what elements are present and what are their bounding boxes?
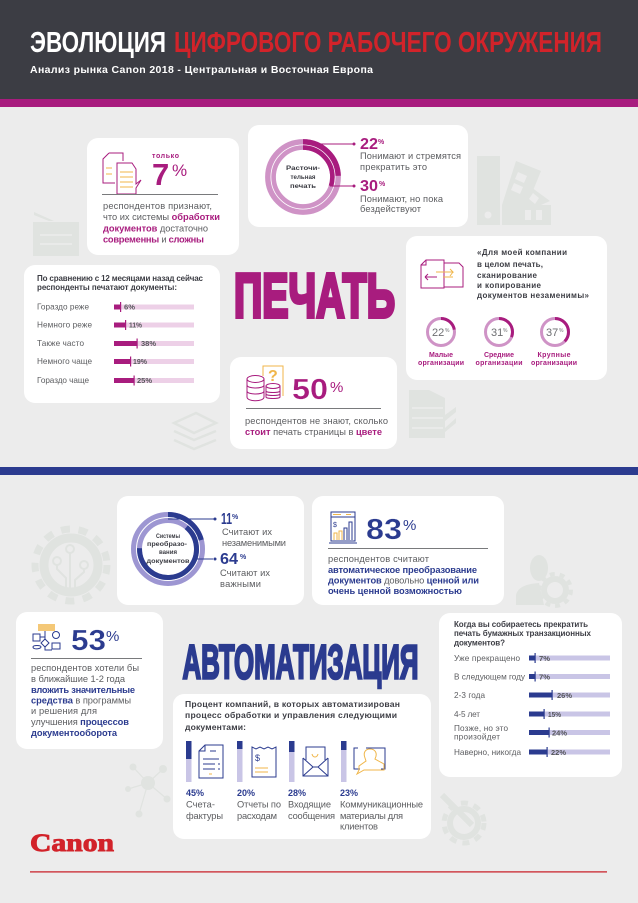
text block — [245, 416, 388, 437]
heading: print: ПЕЧАТЬ — [234, 262, 395, 331]
panel: print frequency bar chart — [24, 265, 220, 403]
donut label: документов — [146, 558, 190, 565]
item labels: клиентов — [340, 822, 378, 832]
figure: 7% — [152, 157, 187, 192]
figure: 22%: % — [378, 139, 385, 146]
background icon: paper stack — [174, 413, 216, 449]
donut label — [146, 533, 190, 565]
item labels: материалы для — [340, 811, 403, 821]
panel title: процесс обработки и управления следующими — [185, 710, 397, 720]
bar chart: 19% — [133, 357, 147, 366]
panel title: документами: — [185, 722, 246, 732]
text block: средства в программы — [31, 696, 131, 706]
text: 30% description — [360, 194, 444, 214]
icon: chat with person — [354, 748, 385, 774]
panel: 53 percent — [16, 612, 163, 749]
panel: stop printing bar chart — [439, 613, 622, 777]
donut captions: Средние — [484, 352, 514, 359]
bar chart: 24% — [552, 728, 567, 738]
subtitle: Анализ рынка Canon 2018 - Центральная и Восточная Европа — [30, 64, 373, 76]
bar chart — [454, 653, 610, 757]
donut captions: Малые — [429, 352, 453, 359]
bar chart: Гораздо чаще — [37, 376, 89, 385]
bar chart: Немного реже — [37, 320, 92, 330]
figure: 11%: 11 — [221, 511, 232, 528]
figure: 83%: 83 — [366, 514, 402, 546]
text block: и решения для — [31, 706, 97, 716]
text block: современны и сложны — [103, 234, 204, 244]
quote text: и копирование — [477, 281, 542, 290]
donut: medium organisations: 31 — [491, 327, 503, 339]
text block: документов достаточно — [103, 224, 208, 234]
item labels: Входящие — [288, 800, 331, 810]
chart title — [37, 274, 204, 292]
quote text: сканирование — [477, 271, 538, 280]
background icon: wrench and gear — [442, 795, 484, 843]
icon: financial chart — [329, 512, 357, 543]
donut: large organisations: 37 — [546, 327, 558, 339]
bar chart: 4-5 лет — [454, 710, 480, 719]
icon: process with money — [33, 624, 60, 650]
donut label: преобразо- — [147, 540, 187, 548]
text block — [31, 663, 139, 738]
item labels: Отчеты по — [237, 800, 281, 810]
bar chart: 7% — [539, 672, 550, 682]
donut label: вания — [159, 549, 177, 556]
panel: only 7 percent — [87, 138, 239, 255]
quote text: «Для моей компании — [477, 248, 567, 257]
text: 22% description: Понимают и стремятся — [360, 151, 461, 161]
text: 11% description: незаменимыми — [222, 538, 286, 548]
figure: 53%: 53 — [71, 625, 106, 657]
figure: 64% — [220, 551, 247, 568]
donut captions — [418, 352, 577, 367]
item labels: Счета- — [186, 800, 215, 810]
donut: small organisations: % — [445, 328, 450, 334]
icon: document exchange — [421, 260, 463, 288]
donut label: печать — [290, 183, 316, 190]
bar chart: 7% — [539, 654, 550, 663]
background icon: office printer — [409, 390, 456, 438]
bar chart: 15% — [548, 710, 561, 719]
donut: large organisations — [542, 318, 568, 346]
figure: 11%: % — [232, 514, 239, 521]
section divider band — [0, 467, 638, 475]
chart title — [454, 620, 592, 648]
figure: 30%: 30 — [360, 178, 378, 195]
donut captions: организации — [476, 360, 522, 367]
panel title — [185, 699, 400, 732]
icon: financial chart: $ — [333, 522, 337, 529]
bar chart: 25% — [137, 376, 152, 385]
text block: что их системы обработки — [103, 212, 220, 222]
text block: стоит печать страницы в цвете — [245, 427, 382, 437]
panel: wasteful printing — [248, 125, 468, 227]
percent values: 23% — [340, 788, 358, 798]
chart title: документов? — [454, 638, 505, 648]
figure: 83% — [366, 514, 416, 546]
bar chart: Позже, но это — [454, 724, 508, 733]
heading: automation: АВТОМАТИЗАЦИЯ — [182, 636, 418, 690]
figure: 83%: % — [403, 517, 416, 534]
text: 64% description: важными — [220, 579, 261, 589]
donut chart — [268, 142, 356, 212]
bar chart: Немного чаще — [37, 357, 92, 366]
figure: 50% — [292, 374, 343, 406]
text block: очень ценной возможностью — [328, 586, 462, 596]
text block: респондентов признают, — [103, 201, 212, 211]
text: 30% description: Понимают, но пока — [360, 194, 444, 204]
icon: receipt — [252, 747, 276, 777]
bar chart: В следующем году — [454, 672, 526, 682]
donut label — [286, 165, 320, 190]
text block — [328, 554, 479, 596]
figure: 53%: % — [106, 628, 119, 645]
icon: coins and question: ? — [268, 368, 278, 385]
donut captions: организации — [418, 360, 464, 367]
text block: респондентов не знают, сколько — [245, 416, 388, 426]
donut: large organisations: % — [559, 328, 564, 334]
background icon: network — [125, 764, 170, 818]
text block: респондентов хотели бы — [31, 663, 139, 673]
bar chart: 6% — [124, 302, 135, 312]
text: 22% description — [360, 151, 461, 172]
quote text: документов незаменимы» — [477, 291, 590, 300]
chart title: По сравнению с 12 месяцами назад сейчас — [37, 274, 204, 283]
icon: envelope — [303, 747, 328, 776]
background icon: person with gear — [516, 555, 571, 606]
item labels — [186, 800, 423, 832]
percent values: 45% — [186, 788, 204, 798]
label: only: только — [152, 153, 179, 160]
icon: invoice — [199, 745, 223, 778]
quote text — [477, 248, 590, 300]
text block: улучшения процессов — [31, 717, 129, 727]
text block: респондентов считают — [328, 554, 430, 564]
bar chart: 2-3 года — [454, 691, 485, 700]
text: 64% description: Считают их — [220, 568, 270, 578]
bar chart: 26% — [557, 691, 572, 700]
bar chart: произойдет — [454, 732, 500, 742]
figure: 64%: % — [240, 554, 247, 561]
bar chart: Уже прекращено — [454, 654, 520, 663]
item labels: фактуры — [186, 811, 223, 821]
item labels: Коммуникационные — [340, 800, 423, 810]
item labels: расходам — [237, 811, 277, 821]
bar chart: 11% — [129, 320, 142, 330]
bar chart: Наверно, никогда — [454, 748, 521, 757]
icon: documents — [103, 153, 141, 194]
donut label: тельная — [290, 174, 316, 181]
text block: документооборота — [31, 728, 118, 738]
text block — [103, 201, 220, 244]
chart title: респонденты печатают документы: — [37, 283, 177, 292]
icon: receipt: $ — [255, 753, 260, 763]
bar chart — [37, 302, 194, 386]
figure: 64%: 64 — [220, 551, 238, 568]
icon: coins and question — [247, 366, 283, 401]
background icon: circuit gear — [35, 529, 107, 601]
text: 11% description — [222, 527, 286, 548]
text: 64% description — [220, 568, 270, 589]
text block: автоматическое преобразование — [328, 565, 477, 575]
text: 30% description: бездействуют — [360, 204, 422, 214]
text block: в ближайшие 1-2 года — [31, 674, 126, 684]
text: 11% description: Считают их — [222, 527, 272, 537]
donut label: Расточи- — [286, 165, 320, 172]
bar chart: 22% — [551, 748, 566, 757]
figure: 30% — [360, 178, 386, 195]
text block: вложить значительные — [31, 685, 135, 695]
figure: 7%: % — [172, 161, 187, 180]
bar chart: 38% — [141, 339, 156, 348]
bar chart: Гораздо реже — [37, 302, 89, 312]
chart title: Когда вы собираетесь прекратить — [454, 620, 588, 629]
text: 22% description: прекратить это — [360, 162, 427, 172]
figure: 50%: 50 — [292, 374, 328, 406]
donut: small organisations — [428, 318, 454, 346]
donut: medium organisations — [486, 318, 512, 346]
percent values: 28% — [288, 788, 306, 798]
percent values — [186, 788, 358, 798]
panel: 50 percent — [230, 357, 397, 449]
bar chart: Также часто — [37, 339, 84, 348]
figure: 22%: 22 — [360, 136, 378, 153]
quote text: в целом печать, — [477, 260, 543, 269]
text block: документов довольно ценной или — [328, 576, 479, 586]
panel: automated document share — [173, 694, 431, 839]
background icon: colour swatches — [477, 156, 551, 225]
chart title: печать бумажных транзакционных — [454, 629, 592, 638]
vertical bars — [186, 741, 346, 782]
logo: Canon: Canon — [30, 830, 114, 857]
percent values: 20% — [237, 788, 255, 798]
panel: document transformation systems — [117, 496, 304, 605]
donut captions: организации — [531, 360, 577, 367]
donut chart — [128, 509, 216, 589]
panel: quote — [406, 236, 607, 380]
title: ЭВОЛЮЦИЯ — [30, 27, 166, 59]
figure: 30%: % — [379, 181, 386, 188]
figure: 50%: % — [330, 379, 343, 396]
donut label: Системы — [156, 533, 180, 540]
panel: 83 percent — [312, 496, 504, 605]
figure: 7%: 7 — [152, 157, 169, 192]
figure: 53% — [71, 625, 119, 657]
donut captions: Крупные — [538, 352, 571, 359]
header band — [0, 0, 638, 107]
donut: medium organisations: % — [503, 328, 508, 334]
panel title: Процент компаний, в которых автоматизирован — [185, 699, 400, 709]
donut: small organisations: 22 — [432, 327, 444, 339]
item labels: сообщения — [288, 811, 335, 821]
background icon: printer — [33, 212, 79, 256]
